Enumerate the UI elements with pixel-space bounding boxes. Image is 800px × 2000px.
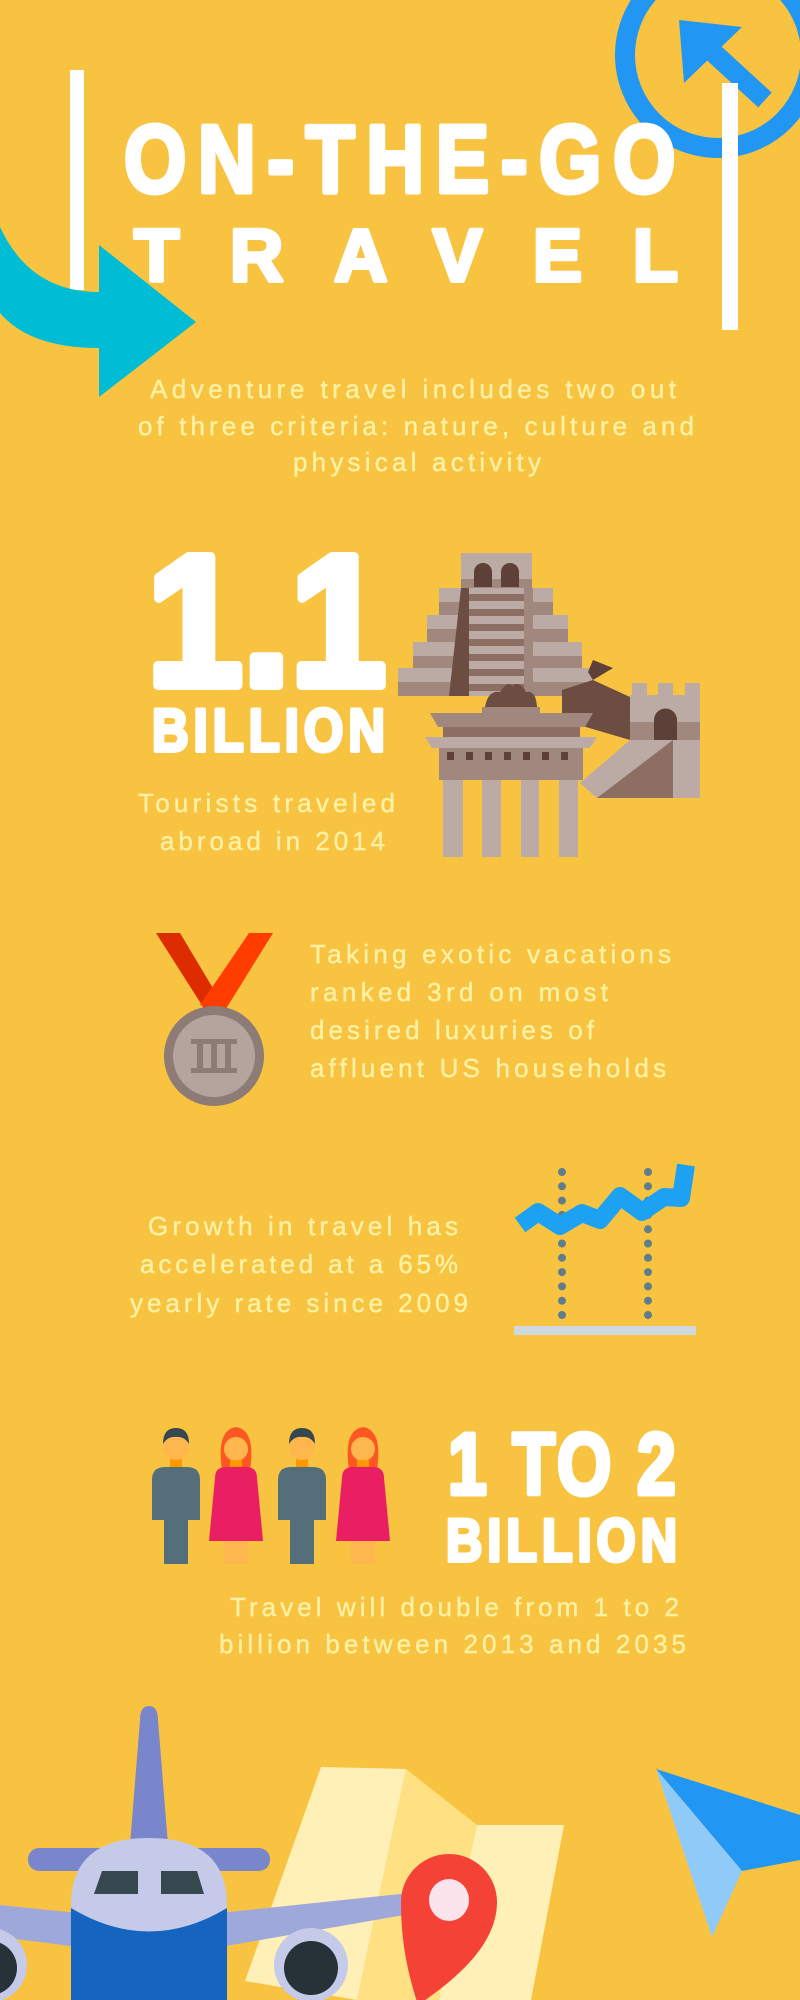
text: growth in travel: accelerated at a 65% bbox=[140, 1249, 458, 1279]
text: travel will double bbox=[219, 1592, 686, 1659]
text: exotic vacations: desired luxuries of bbox=[310, 1015, 595, 1045]
pyramid bbox=[398, 553, 593, 696]
icon: world monuments bbox=[398, 553, 700, 857]
title frame bars bbox=[70, 70, 738, 330]
icon: people bbox=[152, 1427, 390, 1564]
chart: growth line bbox=[514, 1165, 696, 1335]
text: exotic vacations: ranked 3rd on most bbox=[310, 977, 609, 1007]
subtitle text bbox=[138, 374, 694, 477]
text: exotic vacations: affluent US households bbox=[310, 1053, 666, 1083]
icon: airplane bbox=[0, 1706, 416, 2000]
icon: teal curved arrow bbox=[0, 227, 196, 397]
woman 1 bbox=[209, 1427, 263, 1564]
subtitle text: physical activity bbox=[293, 447, 541, 477]
stat: 1 to 2 billion: BILLION bbox=[446, 1507, 682, 1574]
subtitle text: Adventure travel includes two out bbox=[150, 374, 677, 404]
text: tourists traveled: Tourists traveled bbox=[138, 788, 395, 818]
icon: blue circle arrow bbox=[625, 0, 800, 148]
subtitle text: of three criteria: nature, culture and bbox=[138, 411, 694, 441]
text: tourists traveled bbox=[138, 788, 395, 856]
text: tourists traveled: abroad in 2014 bbox=[160, 826, 385, 856]
text: growth in travel bbox=[130, 1211, 468, 1318]
stat: 1 to 2 billion bbox=[446, 1416, 682, 1574]
title: ON-THE-GO bbox=[124, 106, 687, 213]
text: growth in travel: Growth in travel has bbox=[148, 1211, 458, 1241]
text: travel will double: Travel will double from 1 to 2 bbox=[230, 1592, 679, 1622]
icon: bronze medal bbox=[156, 933, 273, 1106]
text: exotic vacations bbox=[310, 939, 671, 1083]
stat: 1.1 billion: 1.1 bbox=[147, 518, 386, 725]
text: travel will double: billion between 2013 and 2035 bbox=[219, 1629, 686, 1659]
man 2 bbox=[278, 1428, 326, 1564]
icon: paper plane bbox=[656, 1769, 800, 1937]
icon: location pin bbox=[401, 1854, 497, 2000]
text: growth in travel: yearly rate since 2009 bbox=[130, 1288, 468, 1318]
man 1 bbox=[152, 1428, 200, 1564]
text: exotic vacations: Taking exotic vacations bbox=[310, 939, 671, 969]
title bbox=[124, 106, 687, 297]
great wall bbox=[562, 660, 700, 798]
title: TRAVEL bbox=[134, 214, 678, 297]
icon: folded map bbox=[245, 1767, 564, 2000]
brandenburg gate bbox=[425, 684, 597, 857]
woman 2 bbox=[336, 1427, 390, 1564]
stat: 1.1 billion: BILLION bbox=[152, 697, 390, 764]
stat: 1 to 2 billion: 1 TO 2 bbox=[448, 1416, 679, 1513]
